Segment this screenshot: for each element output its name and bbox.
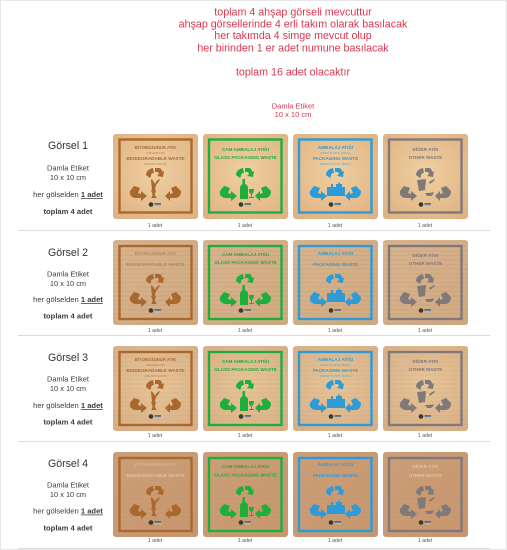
row 2 card: glass: GLASS PACKAGING WASTE [214, 260, 277, 265]
row 1 card: biodegradable: BIODEGRADABLE WASTE [126, 156, 185, 161]
row 1 info: toplam 4 adet [44, 207, 93, 216]
row 2 card: packaging [293, 240, 378, 325]
row 4 info: 10 x 10 cm [50, 490, 86, 499]
row 3 info: her gölselden 1 adet [33, 401, 103, 410]
row 3 quantities: 1 adet [418, 433, 433, 439]
row 2 quantities: 1 adet [418, 328, 433, 334]
row 1 card: glass [203, 134, 288, 219]
row 4 info: Damla Etiket [47, 480, 89, 490]
heading: print instructions: toplam 4 ahşap görseli mevcuttur [214, 6, 372, 18]
row 1 info: 10 x 10 cm [50, 173, 86, 182]
row 3 quantities: 1 adet [238, 433, 253, 439]
row 1 card: other: DİĞER ATIK [412, 145, 439, 152]
row 2 info: her gölselden 1 adet [33, 295, 103, 304]
row 3 quantities [148, 433, 433, 439]
row 1 quantities: 1 adet [418, 223, 433, 229]
row 4 quantities: 1 adet [148, 538, 163, 544]
heading: print instructions: her takımda 4 simge mevcut olup [214, 30, 372, 42]
row 3 card: packaging: (KAĞIT, PLASTİK, METAL) [320, 364, 351, 367]
row 2 info: Görsel 2 [48, 247, 88, 259]
row 1 card: other [383, 134, 468, 219]
row 1 card: other: OTHER WASTE [409, 155, 442, 160]
row 3 card: other [383, 346, 468, 431]
row 4 info: toplam 4 adet [44, 524, 93, 532]
row 3 card: other: DİĞER ATIK [412, 357, 439, 364]
row 3 card: packaging: (PAPER, PLASTIC, METAL) [320, 375, 351, 378]
row 2 card: biodegradable: BIODEGRADABLE WASTE [126, 262, 185, 267]
row 2 info: 10 x 10 cm [50, 279, 86, 288]
row 3 card: packaging [293, 346, 378, 431]
row 1 quantities: 1 adet [328, 223, 343, 229]
row 1 card: packaging: (PAPER, PLASTIC, METAL) [320, 163, 351, 166]
row 3 info: Damla Etiket [47, 374, 89, 384]
row 2 card: glass: CAM AMBALAJ ATIĞI [222, 250, 269, 257]
row 4 card: biodegradable: BİYOBOZUNUR ATIK [135, 462, 176, 467]
row 1 quantities: 1 adet [238, 223, 253, 229]
row 2 card: other: OTHER WASTE [409, 261, 442, 266]
heading: print instructions: toplam 16 adet olacaktır [236, 66, 350, 78]
row 4 quantities: 1 adet [418, 538, 433, 544]
row 2 card: biodegradable: BİYOBOZUNUR ATIK [135, 251, 176, 256]
row 1 card: biodegradable: BİYOBOZUNUR ATIK [135, 145, 176, 150]
row 3 quantities: 1 adet [328, 433, 343, 439]
size label [272, 102, 315, 119]
row 2 info: Damla Etiket [47, 270, 89, 278]
row 2 card: glass [203, 240, 288, 325]
heading: print instructions: her birinden 1 er adet numune basılacak [197, 42, 389, 54]
heading: print instructions [179, 6, 408, 78]
row 1 card: biodegradable [113, 134, 198, 219]
row 2 card: biodegradable [113, 240, 198, 325]
row 3 card: glass: GLASS PACKAGING WASTE [214, 367, 277, 372]
row 4 info: Görsel 4 [48, 458, 88, 470]
row 2 quantities [148, 328, 433, 334]
row 3 info: 10 x 10 cm [50, 384, 86, 393]
row 4 card: glass [203, 452, 288, 537]
row 4 card: other: OTHER WASTE [409, 473, 442, 478]
row 1 info [33, 140, 103, 216]
row 1 card: glass: CAM AMBALAJ ATIĞI [222, 145, 269, 152]
row 3 card: biodegradable [113, 346, 198, 431]
row 1 card: packaging [293, 134, 378, 219]
row 1 quantities: 1 adet [148, 223, 163, 229]
row 3 card: packaging: PACKAGING WASTE [313, 368, 358, 373]
row 2 quantities: 1 adet [148, 328, 163, 334]
row 2 quantities: 1 adet [328, 328, 343, 334]
row 4 card: glass: GLASS PACKAGING WASTE [214, 472, 277, 478]
size label: Damla Etiket [272, 102, 315, 110]
row 3 info: toplam 4 adet [44, 418, 93, 426]
row 4 info [33, 458, 103, 532]
row 3 card: biodegradable: BİYOBOZUNUR ATIK [135, 357, 176, 362]
row 3 card: biodegradable: BIODEGRADABLE WASTE [126, 368, 185, 373]
row 1 info: her gölselden 1 adet [33, 190, 103, 199]
row 2 info: toplam 4 adet [44, 312, 93, 320]
row 4 card: packaging [293, 452, 378, 537]
row 3 card: glass [203, 346, 288, 431]
row 1 quantities [148, 223, 433, 229]
row 1 card: glass: GLASS PACKAGING WASTE [214, 155, 277, 160]
row 3 info: Görsel 3 [48, 352, 88, 364]
row 1 info: Damla Etiket [47, 164, 89, 172]
row 3 info [33, 352, 103, 426]
row 4 card: other: DİĞER ATIK [412, 462, 439, 469]
row 4 card: packaging: AMBALAJ ATIĞI [318, 460, 353, 467]
row 2 card: other [383, 240, 468, 325]
row 4 quantities: 1 adet [328, 538, 343, 544]
row 2 quantities: 1 adet [238, 328, 253, 334]
row 4 card: glass: CAM AMBALAJ ATIĞI [222, 462, 269, 469]
row 1 card: packaging: PACKAGING WASTE [313, 156, 358, 161]
row 1 card: biodegradable: (ORGANİK ATIK) [146, 152, 165, 155]
row 4 quantities: 1 adet [238, 538, 253, 544]
row 3 card: biodegradable: (ORGANIC WASTE) [144, 375, 167, 378]
row 4 quantities [148, 538, 433, 544]
row 2 card: packaging: AMBALAJ ATIĞI [318, 249, 353, 256]
row 4 info: her gölselden 1 adet [33, 506, 103, 516]
row 2 card: packaging: PACKAGING WASTE [313, 262, 358, 267]
row 4 card: biodegradable [113, 452, 198, 537]
row 4 card: packaging: PACKAGING WASTE [313, 473, 358, 478]
size label: 10 x 10 cm [275, 110, 311, 119]
row 3 card: other: OTHER WASTE [409, 367, 442, 372]
row 1 card: biodegradable: (ORGANIC WASTE) [144, 163, 167, 166]
row 4 card: other [383, 452, 468, 537]
heading: print instructions: ahşap görsellerinde 4 erli takım olarak basılacak [179, 18, 408, 30]
row 4 card: biodegradable: BIODEGRADABLE WASTE [126, 473, 185, 478]
row 3 card: packaging: AMBALAJ ATIĞI [318, 355, 353, 362]
row 1 info: Görsel 1 [48, 140, 88, 152]
row 1 card: packaging: AMBALAJ ATIĞI [318, 143, 353, 150]
row 1 card: packaging: (KAĞIT, PLASTİK, METAL) [320, 152, 351, 155]
row 2 info [33, 247, 103, 320]
row 3 card: biodegradable: (ORGANİK ATIK) [146, 364, 165, 367]
row 2 card: other: DİĞER ATIK [412, 251, 439, 258]
row 3 quantities: 1 adet [148, 433, 163, 439]
row 3 card: glass: CAM AMBALAJ ATIĞI [222, 357, 269, 364]
